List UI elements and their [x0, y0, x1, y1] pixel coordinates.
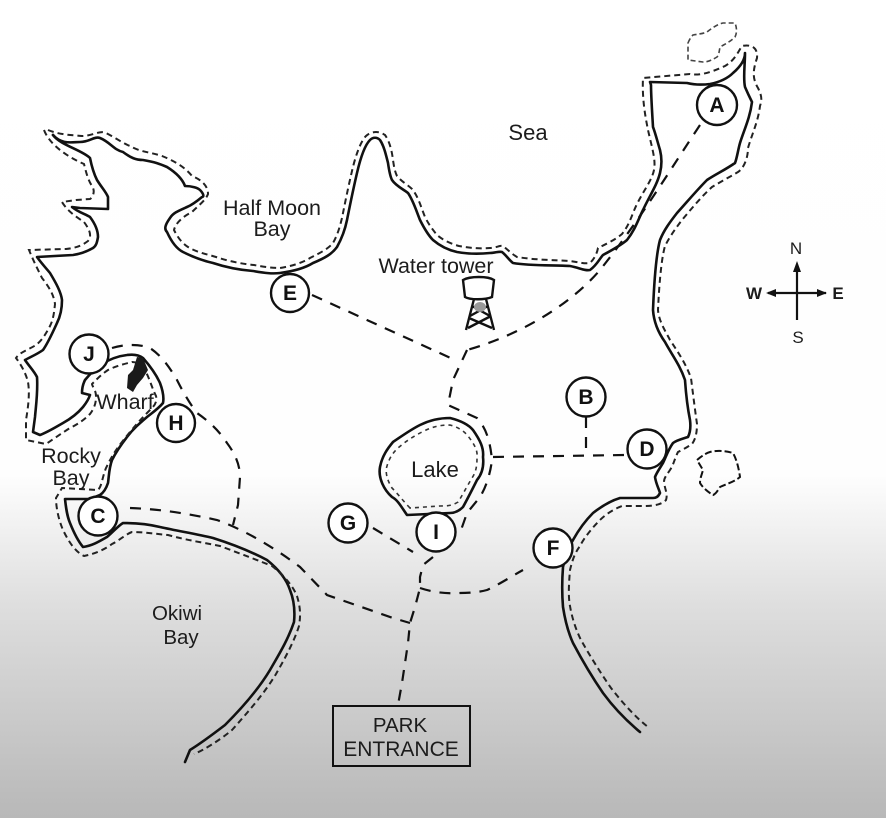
marker E: [271, 274, 309, 312]
label: Rocky Bay: Rocky: [41, 444, 101, 468]
marker G: [328, 504, 368, 542]
compass: W: [746, 284, 763, 303]
marker B: [566, 378, 606, 416]
marker E: E: [283, 282, 297, 305]
marker A: [697, 85, 737, 125]
park entrance box: PARK: [373, 714, 427, 737]
marker J: J: [83, 343, 95, 366]
marker H: H: [168, 412, 184, 435]
marker J: [70, 334, 108, 374]
marker I: [416, 512, 456, 552]
marker F: [534, 528, 572, 568]
label: Lake: Lake: [411, 457, 459, 482]
icon: wharf jetty: [127, 357, 148, 392]
coastline: north and east: [48, 46, 761, 732]
label: Half Moon Bay: Half Moon: [223, 196, 321, 220]
dashed paths: [112, 125, 700, 705]
marker I: I: [433, 521, 439, 544]
marker B: B: [578, 386, 594, 409]
marker C: C: [90, 505, 106, 528]
label: Okiwi Bay: Okiwi: [152, 602, 202, 625]
park entrance box: [333, 706, 470, 766]
park entrance box: ENTRANCE: [343, 738, 459, 761]
compass: [746, 239, 844, 347]
marker A: A: [709, 94, 725, 117]
compass: N: [790, 239, 802, 258]
lake: [380, 418, 483, 515]
compass: E: [832, 284, 844, 303]
icon: water tower: [463, 277, 494, 330]
coastline: west, wharf and Okiwi Bay: [16, 130, 300, 762]
marker F: F: [547, 537, 560, 560]
marker D: D: [639, 438, 655, 461]
marker D: [628, 430, 666, 468]
label: Wharf: Wharf: [96, 390, 154, 414]
marker H: [157, 404, 195, 442]
label: Water tower: Water tower: [378, 254, 494, 278]
east island: [697, 451, 740, 495]
label: Half Moon Bay: Bay: [253, 217, 291, 241]
marker C: [78, 496, 118, 536]
label: Sea: Sea: [508, 120, 548, 145]
north-east island: [688, 23, 736, 62]
compass: S: [792, 328, 804, 347]
marker G: G: [340, 512, 356, 535]
label: Rocky Bay: Bay: [52, 466, 90, 490]
label: Okiwi Bay: Bay: [163, 626, 199, 649]
